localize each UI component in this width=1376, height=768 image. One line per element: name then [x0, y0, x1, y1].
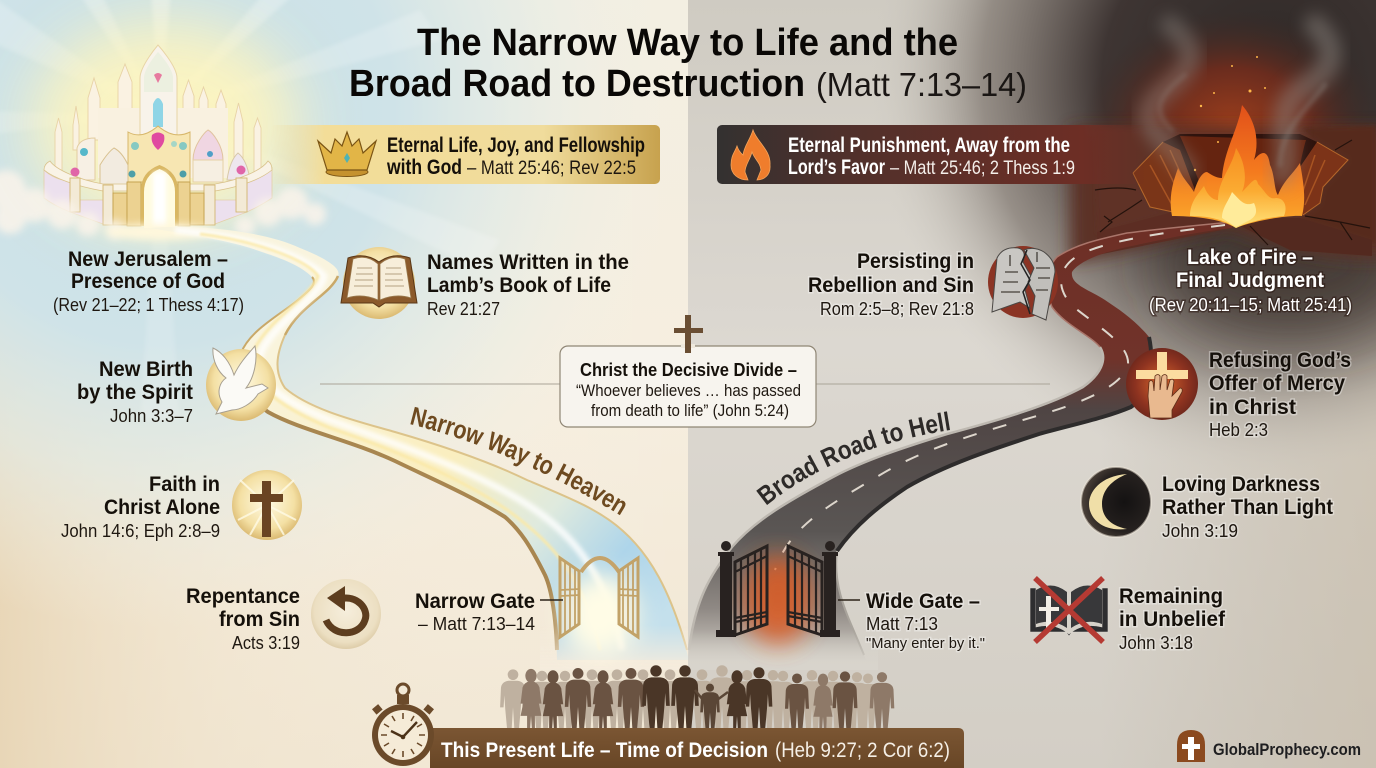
smoke plumes	[1148, 25, 1331, 175]
label: Lake of Fire: (Rev 20:11–15; Matt 25:41)	[1149, 295, 1352, 315]
icon: crescent moon	[1081, 467, 1151, 537]
bottom bar: this present life: (Heb 9:27; 2 Cor 6:2)	[775, 739, 950, 762]
Christ the decisive divide callout	[320, 315, 1050, 427]
bottom bar: this present life: This Present Life – Time of Decision	[441, 739, 768, 762]
icon: open Book of Life	[341, 247, 417, 319]
label: Lake of Fire: Lake of Fire –	[1187, 246, 1313, 269]
label: Loving Darkness: Loving Darkness	[1162, 473, 1320, 496]
icon: divide cross	[674, 315, 703, 353]
fade road bottoms into the crowd	[540, 625, 878, 670]
Christ the decisive divide callout: “Whoever believes … has passed	[576, 381, 801, 400]
label: Refusing God's Offer: in Christ	[1209, 396, 1296, 419]
label: Refusing God's Offer: Refusing God’s	[1209, 349, 1351, 372]
icon: flame	[731, 130, 770, 180]
label: Faith in Christ: John 14:6; Eph 2:8–9	[61, 521, 220, 541]
label: Remaining in Unbelief: in Unbelief	[1119, 608, 1226, 631]
label: Narrow Gate: Narrow Gate	[415, 590, 535, 613]
label: New Jerusalem	[53, 248, 244, 315]
broad road	[688, 222, 1232, 660]
label: New Jerusalem: New Jerusalem –	[68, 248, 228, 271]
label: Loving Darkness	[1162, 473, 1333, 541]
bottom bar: this present life	[430, 728, 964, 768]
label: New Birth	[77, 358, 193, 426]
title: Broad Road to Destruction	[349, 63, 805, 105]
label: New Birth: New Birth	[99, 358, 193, 381]
label: Faith in Christ	[61, 473, 220, 541]
Christ the decisive divide callout: from death to life” (John 5:24)	[591, 401, 789, 420]
label: Persisting in Rebellion: Persisting in	[857, 250, 974, 273]
label: New Jerusalem: Presence of God	[71, 270, 225, 293]
banner: eternal punishment	[717, 125, 1147, 184]
label: Lake of Fire	[1149, 246, 1352, 315]
road label: Narrow Way to Heaven: Narrow Way to Heaven	[410, 406, 626, 516]
label: Loving Darkness: John 3:19	[1162, 521, 1238, 541]
label: New Birth: John 3:3–7	[110, 406, 193, 426]
label: Loving Darkness: Rather Than Light	[1162, 496, 1333, 519]
narrow way road	[150, 227, 689, 660]
label: New Birth: by the Spirit	[77, 381, 193, 404]
banner: eternal life: – Matt 25:46; Rev 22:5	[467, 158, 636, 179]
banner: eternal punishment: Eternal Punishment, Away from the	[788, 134, 1070, 157]
wide gate	[716, 541, 840, 644]
banner: eternal life	[270, 125, 660, 184]
label: Refusing God's Offer: Heb 2:3	[1209, 420, 1268, 440]
label: Persisting in Rebellion: Rom 2:5–8; Rev 21:8	[820, 299, 974, 319]
label: Names Written: Names Written in the	[427, 251, 629, 274]
label: Repentance	[186, 585, 300, 653]
icon: glowing cross	[232, 470, 302, 540]
background: dark right half	[688, 0, 1376, 768]
label: Narrow Gate	[415, 590, 563, 634]
banner: eternal punishment: – Matt 25:46; 2 Thess 1:9	[890, 158, 1075, 179]
icon: crown	[318, 132, 376, 176]
label: Persisting in Rebellion	[808, 250, 974, 319]
label: Names Written: Rev 21:27	[427, 299, 500, 319]
label: Repentance: Repentance	[186, 585, 300, 608]
label: New Jerusalem: (Rev 21–22; 1 Thess 4:17)	[53, 295, 244, 315]
label: Wide Gate	[838, 590, 985, 652]
icon: broken stone tablets	[988, 246, 1058, 320]
label: Refusing God's Offer	[1209, 349, 1351, 440]
banner: eternal life: Eternal Life, Joy, and Fellowship	[387, 134, 645, 157]
label: Faith in Christ: Christ Alone	[104, 496, 220, 519]
label: Wide Gate: "Many enter by it."	[866, 635, 985, 652]
label: Narrow Gate: – Matt 7:13–14	[418, 614, 535, 634]
icon: stopwatch	[372, 684, 434, 766]
background: heavenly left half	[0, 0, 688, 768]
label: Remaining in Unbelief	[1119, 585, 1226, 653]
label: Names Written: Lamb’s Book of Life	[427, 274, 611, 297]
banner: eternal punishment: Lord’s Favor	[788, 156, 885, 179]
heavenly city: New Jerusalem	[44, 45, 272, 228]
logo: GlobalProphecy.com	[1177, 730, 1361, 762]
label: Names Written	[427, 251, 629, 319]
label: Faith in Christ: Faith in	[149, 473, 220, 496]
label: Wide Gate: Wide Gate –	[866, 590, 980, 613]
icon: dove	[206, 346, 276, 421]
clouds under the city	[0, 170, 326, 240]
icon: repentance turn arrow	[311, 579, 381, 649]
label: Wide Gate: Matt 7:13	[866, 614, 938, 634]
label: Remaining in Unbelief: Remaining	[1119, 585, 1223, 608]
label: Repentance: from Sin	[219, 608, 300, 631]
icon: crossed-out Bible	[1030, 578, 1108, 642]
crowd of people	[500, 665, 894, 728]
Christ the decisive divide callout: Christ the Decisive Divide –	[580, 360, 797, 380]
narrow gate	[560, 558, 638, 657]
title: (Matt 7:13–14)	[816, 66, 1027, 103]
title	[349, 22, 1027, 105]
flames	[1171, 56, 1304, 228]
title: The Narrow Way to Life and the	[417, 22, 958, 64]
label: Repentance: Acts 3:19	[232, 633, 300, 653]
banner: eternal life: with God	[386, 156, 462, 179]
label: Lake of Fire: Final Judgment	[1176, 269, 1324, 292]
label: Remaining in Unbelief: John 3:18	[1119, 633, 1193, 653]
label: Refusing God's Offer: Offer of Mercy	[1209, 372, 1345, 395]
road label: Broad Road to Hell: Broad Road to Hell	[756, 411, 950, 505]
label: Persisting in Rebellion: Rebellion and Sin	[808, 274, 974, 297]
center spire	[140, 45, 177, 135]
lake of fire pit	[1070, 10, 1376, 335]
icon: refusing mercy, hand before cross	[1126, 348, 1198, 420]
